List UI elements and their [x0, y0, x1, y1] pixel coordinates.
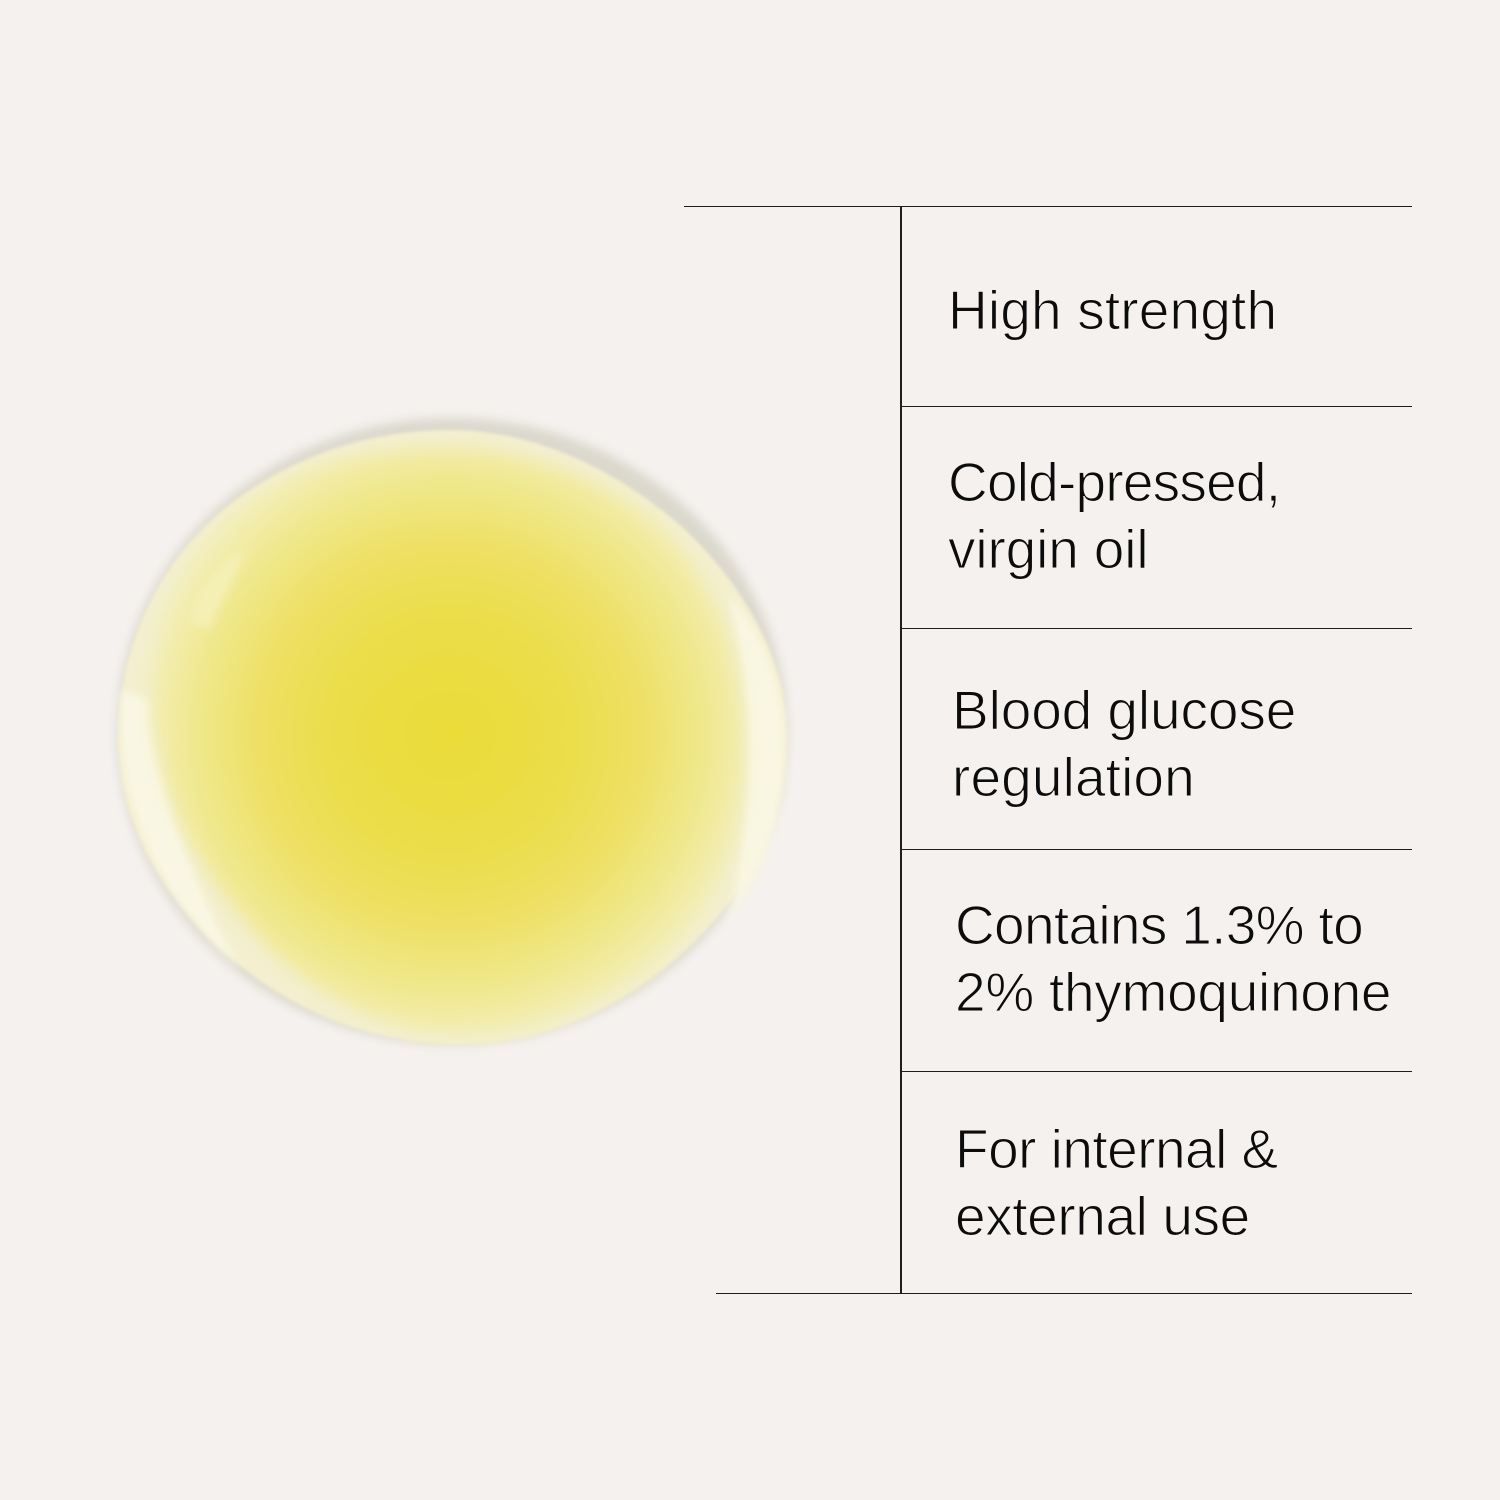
droplet right crescent — [728, 595, 785, 920]
table bottom rule — [716, 1293, 1412, 1294]
table vertical rule — [900, 206, 902, 1294]
row rule 2 — [901, 628, 1412, 629]
droplet yellow body — [150, 446, 745, 1035]
text: blood glucose: Blood glucose — [952, 679, 1296, 741]
text: use: external use — [955, 1185, 1250, 1247]
text: use — [955, 1118, 1278, 1247]
text: high strength: High strength — [948, 279, 1277, 341]
text: blood glucose: regulation — [952, 746, 1195, 808]
text: use: For internal & — [955, 1118, 1278, 1180]
droplet highlight — [190, 548, 246, 630]
text: cold-pressed — [948, 451, 1280, 580]
row rule 3 — [901, 849, 1412, 850]
droplet lower left crescent — [121, 690, 240, 968]
text: thymoquinone — [955, 894, 1391, 1023]
droplet rim — [118, 430, 787, 1045]
text: cold-pressed: virgin oil — [948, 518, 1148, 580]
icon: oil droplet — [114, 415, 790, 1048]
table top rule — [684, 206, 1412, 207]
text: cold-pressed: Cold-pressed, — [948, 451, 1280, 513]
row rule 1 — [901, 406, 1412, 407]
text: thymoquinone: 2% thymoquinone — [955, 961, 1391, 1023]
row rule 4 — [901, 1071, 1412, 1072]
text: blood glucose — [952, 679, 1296, 808]
droplet shadow — [117, 418, 787, 1044]
text: thymoquinone: Contains 1.3% to — [955, 894, 1363, 956]
